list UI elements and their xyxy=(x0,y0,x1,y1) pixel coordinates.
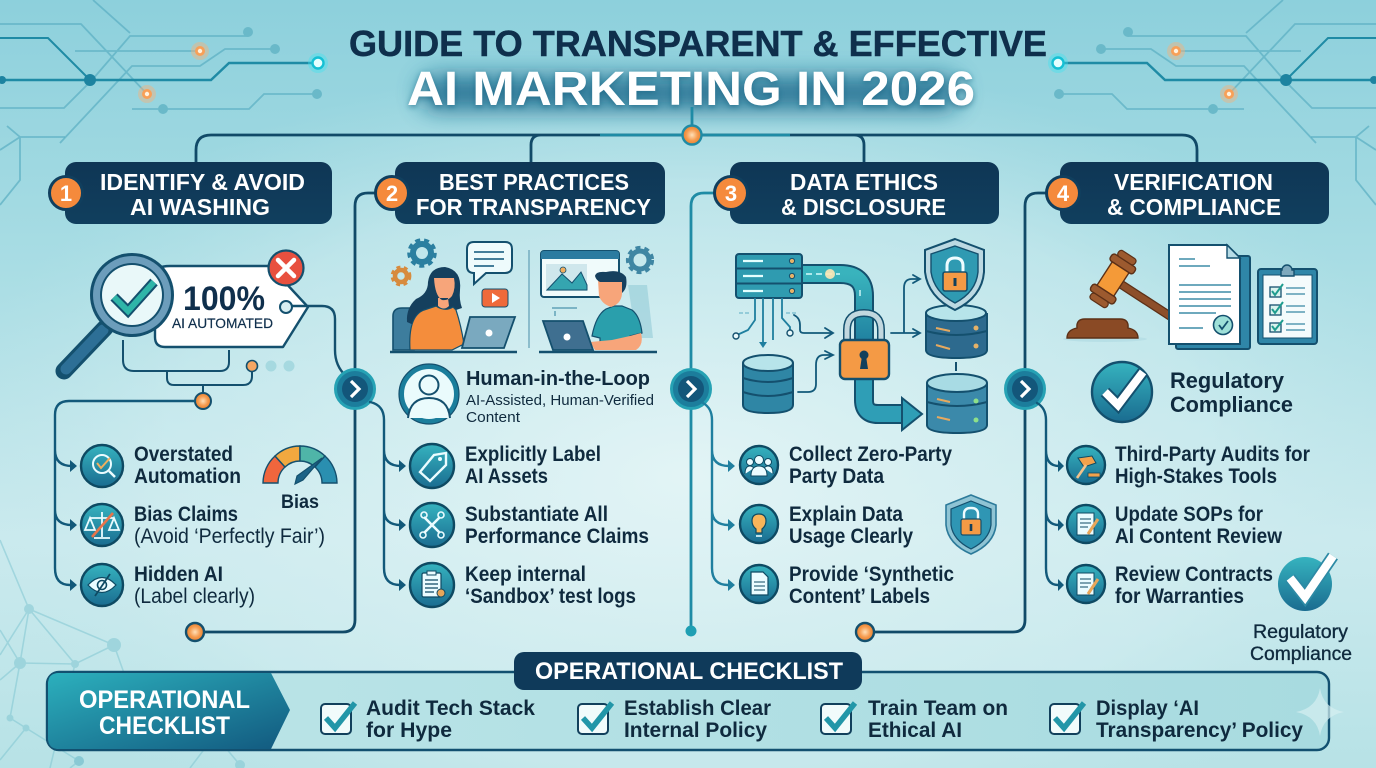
item: review contracts xyxy=(1067,563,1273,608)
item: substantiate claims: Substantiate All xyxy=(465,503,608,526)
branch arrows: column 2 xyxy=(370,402,406,591)
item: explicitly label: Explicitly Label xyxy=(465,443,601,466)
text: human-in-the-loop: AI-Assisted, Human-Verified xyxy=(466,393,654,409)
title xyxy=(349,23,1047,118)
item: sandbox logs xyxy=(410,563,636,608)
item: bias claims: Bias Claims xyxy=(134,503,238,526)
panel: section 4 header xyxy=(1046,162,1329,224)
panel: section 3 header: & DISCLOSURE xyxy=(781,194,946,220)
item: third-party audits: Third-Party Audits for xyxy=(1115,443,1310,466)
pipes xyxy=(802,274,864,345)
item: overstated automation: Automation xyxy=(134,465,241,488)
checklist item 4 xyxy=(1050,696,1303,742)
panel: section 1 header xyxy=(50,162,332,224)
item: bias claims: (Avoid ‘Perfectly Fair’) xyxy=(134,525,325,548)
banner arrow: CHECKLIST xyxy=(99,712,230,740)
decorative circuit: top right xyxy=(1048,0,1376,205)
chevron node 1 xyxy=(336,370,374,408)
title: GUIDE TO TRANSPARENT & EFFECTIVE xyxy=(349,23,1047,64)
checklist item 2: Establish Clear xyxy=(624,696,772,720)
decorative network: bottom left xyxy=(0,540,245,768)
panel: section 1 header: IDENTIFY & AVOID xyxy=(100,169,305,195)
node: column 1 list start xyxy=(195,393,211,409)
gauge: bias: Bias xyxy=(281,492,319,513)
shield xyxy=(925,239,984,310)
branch arrows: column 1 xyxy=(55,401,195,591)
title: AI MARKETING IN 2026 xyxy=(407,63,975,116)
panel: section 4 header: VERIFICATION xyxy=(1114,169,1273,195)
icon: regulatory compliance check xyxy=(1092,362,1152,422)
node: column 3 end xyxy=(856,623,874,641)
item: zero-party data: Collect Zero-Party xyxy=(789,443,952,466)
illustration: data flow with lock xyxy=(733,239,987,433)
server xyxy=(736,254,802,298)
item: update SOPs: AI Content Review xyxy=(1115,525,1283,548)
panel: section 3 header xyxy=(714,162,999,224)
item: bias claims xyxy=(81,503,325,548)
item: hidden AI xyxy=(81,563,255,608)
illustration: gavel, document and clipboard xyxy=(1063,245,1317,349)
left database xyxy=(743,355,793,413)
item: third-party audits: High-Stakes Tools xyxy=(1115,465,1277,488)
text: human-in-the-loop xyxy=(466,367,654,426)
item: review contracts: Review Contracts xyxy=(1115,563,1273,586)
item: explain data: Explain Data xyxy=(789,503,903,526)
window xyxy=(541,251,619,297)
gauge: bias xyxy=(263,446,337,513)
checklist item 1 xyxy=(321,696,535,742)
panel: section 2 header: FOR TRANSPARENCY xyxy=(416,194,651,220)
text: regulatory compliance: Compliance xyxy=(1170,392,1293,417)
panel: section 2 header xyxy=(376,162,665,224)
item: explicitly label: AI Assets xyxy=(465,465,548,488)
chevron node 3 xyxy=(1006,370,1044,408)
icon: shield with lock xyxy=(946,495,996,554)
item: hidden AI: (Label clearly) xyxy=(134,585,255,608)
right databases xyxy=(926,305,987,433)
top connector tree xyxy=(196,107,1197,162)
panel: section 2 header: BEST PRACTICES xyxy=(439,169,629,195)
icon: large check badge xyxy=(1278,556,1333,611)
branch arrows: column 4 xyxy=(1037,403,1064,591)
text: regulatory compliance caption: Regulatory xyxy=(1253,622,1349,643)
checklist item 1: Audit Tech Stack xyxy=(366,696,535,720)
title: AI MARKETING IN 2026 xyxy=(407,65,975,118)
illustration: woman and man at laptops xyxy=(390,240,657,352)
heading pill: OPERATIONAL CHECKLIST xyxy=(535,658,843,685)
panel: section 4 header: 4 xyxy=(1057,181,1070,206)
item: zero-party data xyxy=(740,443,952,488)
item: explicitly label xyxy=(410,443,601,488)
item: synthetic labels xyxy=(740,563,954,608)
heading pill xyxy=(514,652,862,690)
checklist item 4: Display ‘AI xyxy=(1096,696,1199,720)
padlock xyxy=(840,313,889,379)
illustration: magnifier and 100% AI automated tag: 100% xyxy=(183,280,265,318)
item: explain data: Usage Clearly xyxy=(789,525,913,548)
illustration: magnifier and 100% AI automated tag xyxy=(64,250,346,394)
checklist item 3 xyxy=(821,696,1008,742)
checklist item 3: Train Team on xyxy=(868,696,1008,720)
item: substantiate claims: Performance Claims xyxy=(465,525,649,548)
gears xyxy=(392,240,652,285)
column flow lines xyxy=(204,193,1063,636)
item: sandbox logs: ‘Sandbox’ test logs xyxy=(465,585,636,608)
panel: section 3 header: DATA ETHICS xyxy=(790,169,938,195)
panel: section 4 header: & COMPLIANCE xyxy=(1107,194,1281,220)
item: sandbox logs: Keep internal xyxy=(465,563,586,586)
chevron node 2 xyxy=(672,370,710,408)
checklist item 2: Internal Policy xyxy=(624,718,767,742)
item: explain data xyxy=(740,503,913,548)
decorative circuit: top left xyxy=(0,0,328,205)
panel: section 1 header: 1 xyxy=(60,181,72,206)
panel: section 1 header: AI WASHING xyxy=(130,194,270,220)
item: overstated automation xyxy=(81,443,241,488)
item: hidden AI: Hidden AI xyxy=(134,563,223,586)
illustration: magnifier and 100% AI automated tag: AI AUTOMATED xyxy=(172,315,273,331)
item: zero-party data: Party Data xyxy=(789,465,884,488)
text: human-in-the-loop: Content xyxy=(466,410,520,426)
sparkle xyxy=(1296,688,1344,736)
panel: operational checklist xyxy=(47,652,1344,750)
item: overstated automation: Overstated xyxy=(134,443,233,466)
item: synthetic labels: Provide ‘Synthetic xyxy=(789,563,954,586)
checklist item 1: for Hype xyxy=(366,718,452,742)
panel: section 2 header: 2 xyxy=(386,181,398,206)
text: regulatory compliance: Regulatory xyxy=(1170,368,1285,393)
text: human-in-the-loop: Human-in-the-Loop xyxy=(466,367,650,390)
icon: human-in-the-loop xyxy=(399,364,459,424)
item: update SOPs xyxy=(1067,503,1283,548)
text: regulatory compliance caption: Compliance xyxy=(1250,644,1352,665)
man xyxy=(628,285,653,338)
woman xyxy=(393,308,414,350)
checklist item 4: Transparency’ Policy xyxy=(1096,718,1303,742)
text: regulatory compliance xyxy=(1170,368,1293,417)
item: review contracts: for Warranties xyxy=(1115,585,1244,608)
checklist item 3: Ethical AI xyxy=(868,718,962,742)
item: third-party audits xyxy=(1067,443,1310,488)
banner arrow: OPERATIONAL xyxy=(79,686,250,714)
item: update SOPs: Update SOPs for xyxy=(1115,503,1263,526)
banner arrow xyxy=(48,673,290,749)
text: regulatory compliance caption xyxy=(1250,622,1352,665)
checklist item 2 xyxy=(578,696,772,742)
node: column 1 end xyxy=(186,623,204,641)
item: substantiate claims xyxy=(410,503,649,548)
branch arrows: column 3 xyxy=(703,403,735,591)
item: synthetic labels: Content’ Labels xyxy=(789,585,930,608)
panel: section 3 header: 3 xyxy=(725,181,737,206)
